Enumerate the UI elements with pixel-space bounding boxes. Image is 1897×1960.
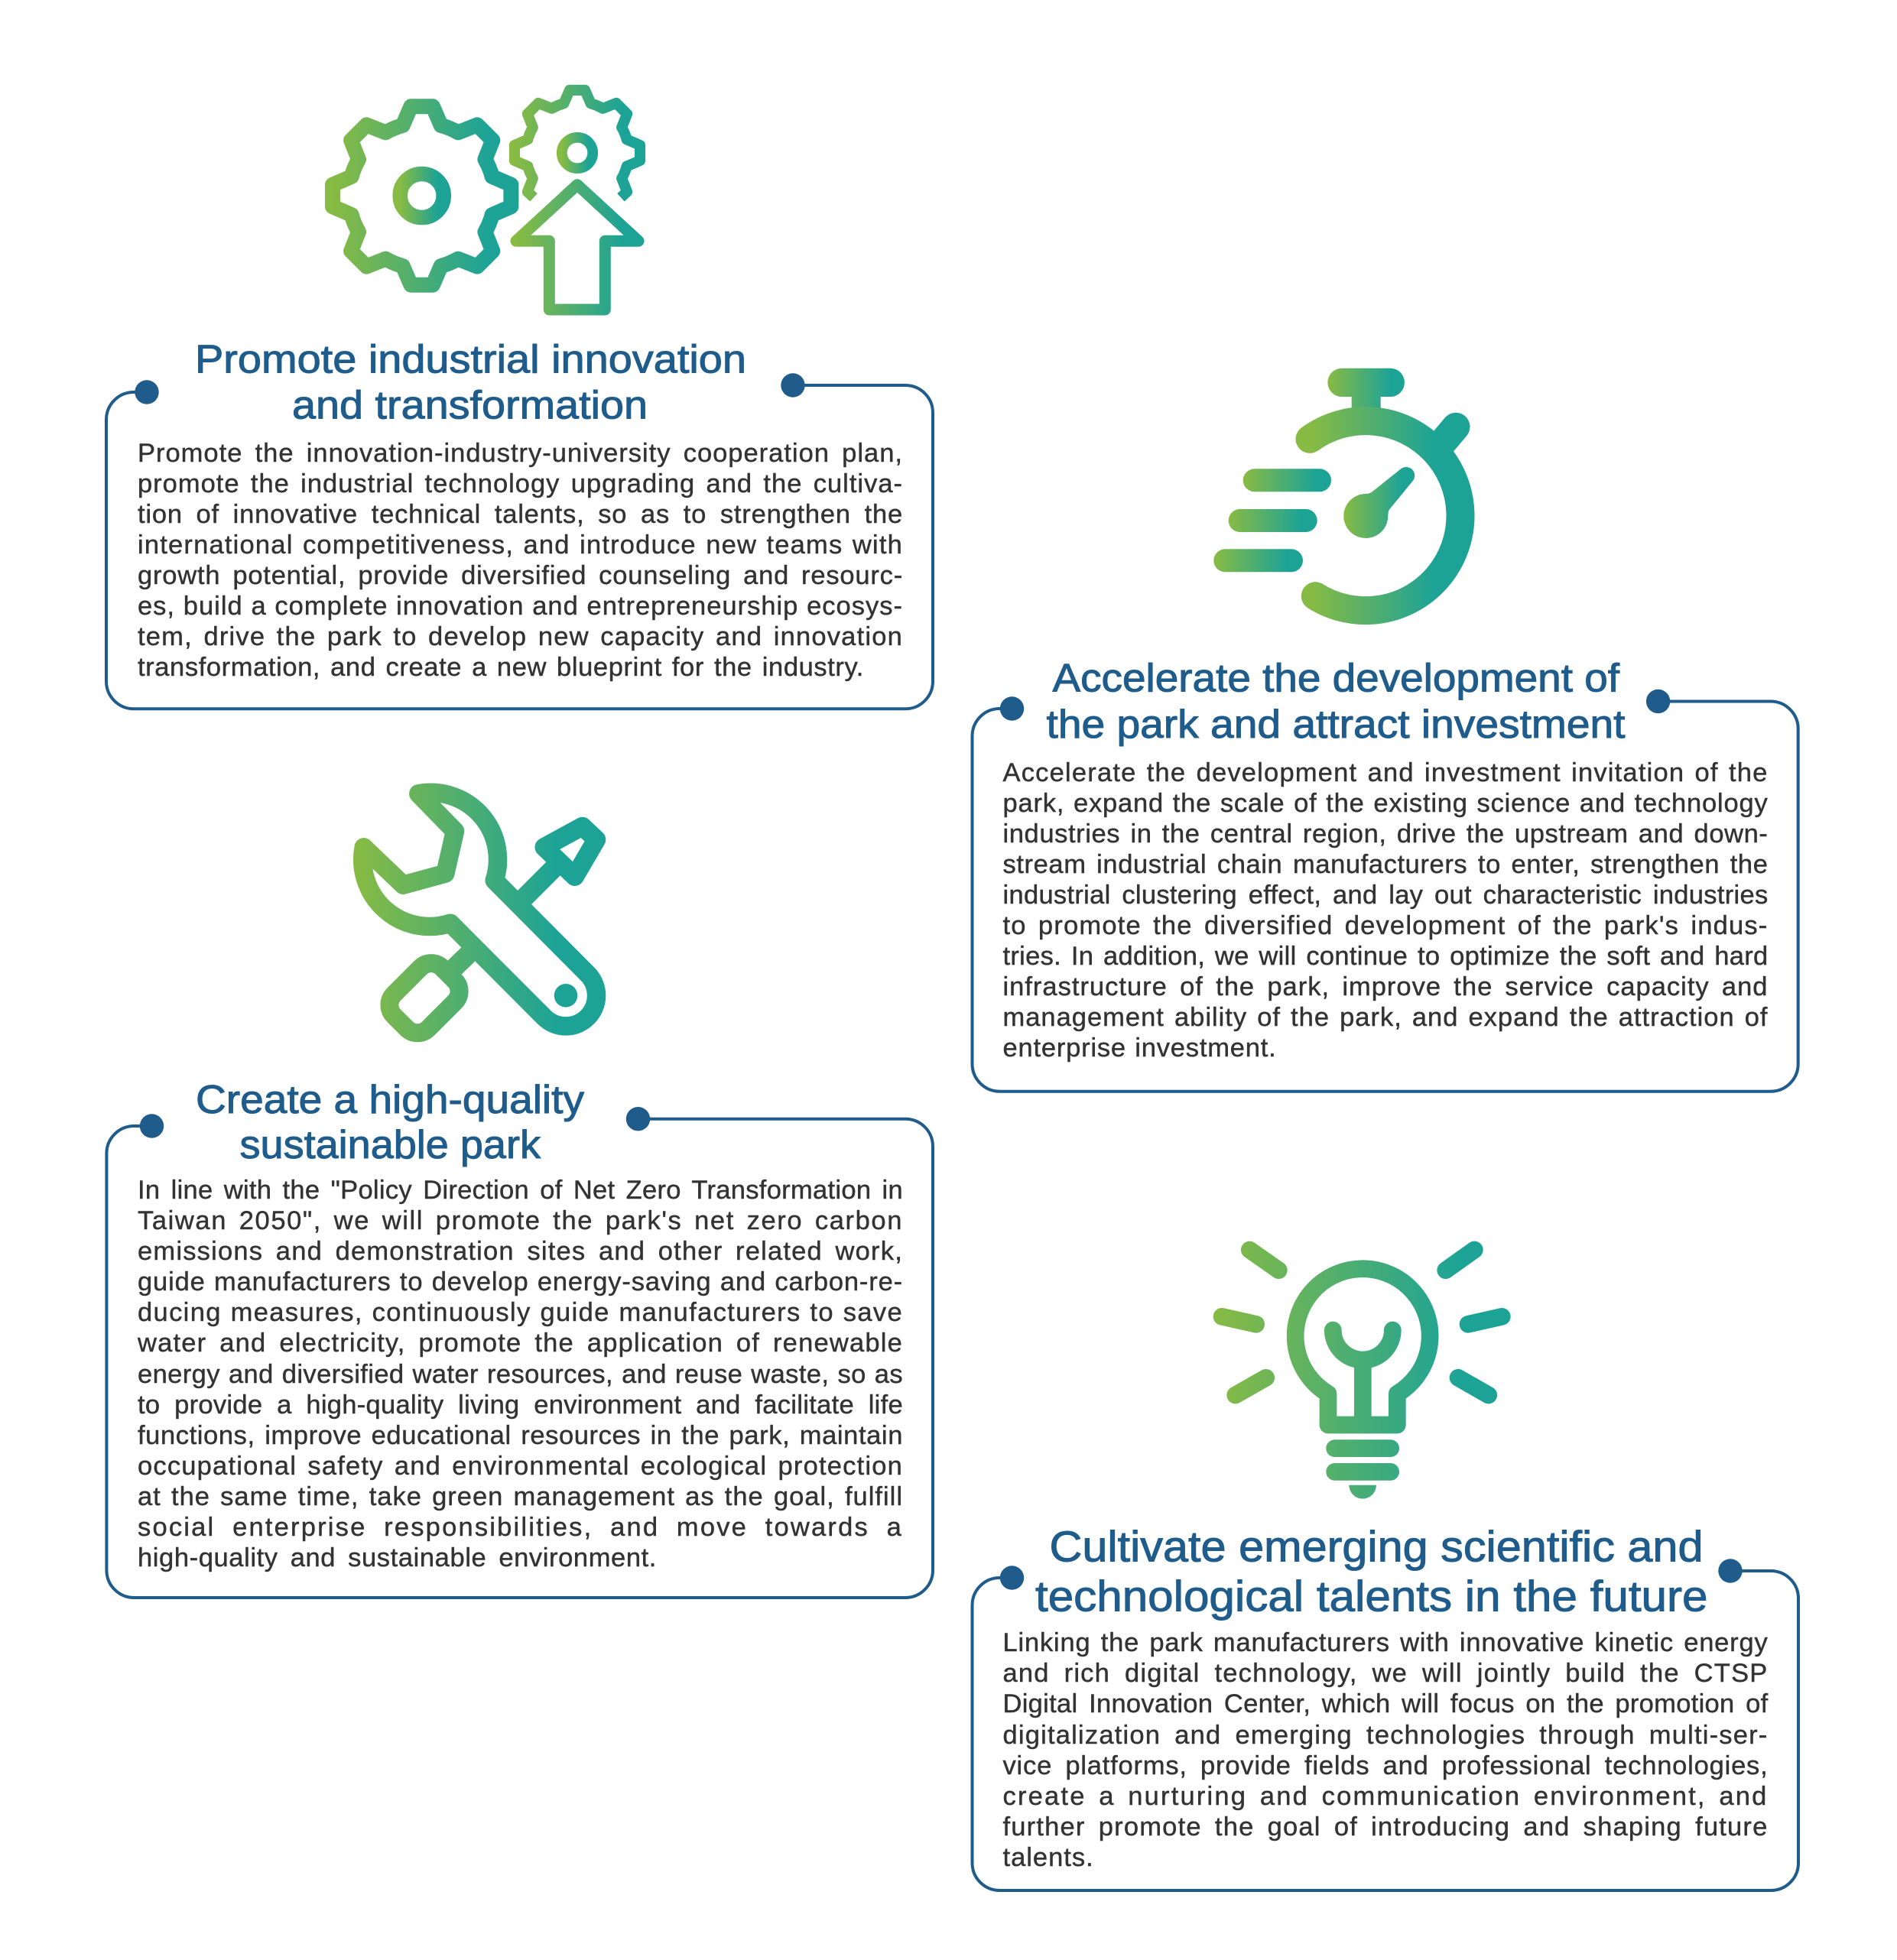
speed line 1 — [1243, 469, 1331, 492]
panel: promote industrial innovation — [105, 338, 934, 711]
body text: promote the industrial technology upgrading and the cultiva- — [138, 469, 903, 498]
icon: small gear — [515, 90, 640, 197]
body text — [138, 439, 903, 682]
body text: enterprise investment. — [1003, 1034, 1277, 1063]
heading — [195, 338, 746, 428]
body text — [1002, 758, 1768, 1063]
stopwatch hand — [1343, 467, 1415, 538]
body text: management ability of the park, and expand the attraction of — [1003, 1003, 1768, 1032]
body text: park, expand the scale of the existing science and technology — [1003, 789, 1768, 818]
stopwatch crown — [1327, 368, 1405, 417]
body text: water and electricity, promote the application of renewable — [138, 1329, 903, 1358]
body text: social enterprise responsibilities, and move towards a — [138, 1513, 903, 1542]
body text: es, build a complete innovation and entrepreneurship ecosys- — [138, 592, 903, 621]
body text: functions, improve educational resources in the park, maintain — [138, 1421, 903, 1450]
icon: large gear — [333, 106, 511, 285]
body text: guide manufacturers to develop energy-saving and carbon-re- — [138, 1267, 903, 1296]
icon: wrench and screwdriver — [353, 783, 606, 1043]
body text: occupational safety and environmental ecological protection — [138, 1452, 903, 1481]
bulb base bar 2 — [1326, 1463, 1399, 1481]
body text: to promote the diversified development of the park's indus- — [1003, 911, 1768, 940]
heading: sustainable park — [240, 1123, 541, 1167]
bulb filament — [1333, 1330, 1392, 1360]
heading: Create a high-quality — [196, 1078, 584, 1122]
heading: technological talents in the future — [1035, 1572, 1708, 1621]
heading: and transformation — [292, 384, 648, 428]
body text: tion of innovative technical talents, so as to strengthen the — [138, 500, 903, 529]
screwdriver grip — [389, 963, 460, 1033]
icon: stopwatch — [1213, 368, 1474, 625]
panel: create a high-quality sustainable park — [105, 1078, 934, 1599]
body text: industries in the central region, drive the upstream and down- — [1003, 819, 1768, 849]
body text: Promote the innovation-industry-university cooperation plan, — [138, 439, 903, 468]
speed line 3 — [1213, 549, 1303, 572]
filament stem — [1354, 1360, 1372, 1425]
heading — [196, 1078, 585, 1167]
body text: talents. — [1003, 1843, 1094, 1872]
body text: tries. In addition, we will continue to optimize the soft and hard — [1003, 942, 1768, 971]
body text: and rich digital technology, we will jointly build the CTSP — [1003, 1659, 1768, 1688]
panel frame — [971, 690, 1800, 1093]
light rays — [1222, 1250, 1502, 1395]
wrench — [362, 793, 596, 1026]
body text: international competitiveness, and introduce new teams with — [138, 531, 903, 560]
heading: Cultivate emerging scientific and — [1049, 1523, 1704, 1572]
icon: up arrow — [516, 185, 638, 310]
body text: Taiwan 2050", we will promote the park's net zero carbon — [138, 1206, 903, 1235]
icon: gears with up arrow — [325, 84, 645, 315]
body text: Linking the park manufacturers with innovative kinetic energy — [1003, 1628, 1768, 1657]
heading: Promote industrial innovation — [195, 338, 746, 382]
screwdriver tip — [544, 826, 596, 877]
body text: stream industrial chain manufacturers to enter, strengthen the — [1003, 850, 1768, 879]
icon: large gear hub — [400, 174, 443, 217]
body text: at the same time, take green management as the goal, fulfill — [138, 1482, 903, 1511]
stopwatch side button — [1437, 427, 1456, 449]
heading: Accelerate the development of — [1052, 657, 1620, 701]
bulb base bar 1 — [1326, 1439, 1399, 1457]
body text: to provide a high-quality living environment and facilitate life — [138, 1390, 903, 1420]
stopwatch ring — [1310, 421, 1460, 611]
panel: accelerate the development — [971, 657, 1800, 1093]
heading: the park and attract investment — [1046, 703, 1626, 747]
body text: infrastructure of the park, improve the service capacity and — [1003, 972, 1768, 1001]
body text: energy and diversified water resources, and reuse waste, so as — [138, 1360, 903, 1389]
body text: industrial clustering effect, and lay out characteristic industries — [1003, 881, 1768, 910]
body text — [1002, 1628, 1768, 1872]
body text — [138, 1176, 903, 1572]
icon: light bulb — [1213, 1241, 1511, 1498]
heading — [1035, 1523, 1708, 1621]
screwdriver shaft lower — [451, 950, 473, 971]
body text: emissions and demonstration sites and other related work, — [138, 1237, 903, 1266]
panel: cultivate emerging talents — [971, 1523, 1800, 1892]
body text: further promote the goal of introducing and shaping future — [1003, 1812, 1768, 1842]
speed line 2 — [1229, 509, 1317, 532]
body text: tem, drive the park to develop new capacity and innovation — [138, 622, 903, 651]
panel frame — [105, 1107, 934, 1599]
bulb tip — [1349, 1485, 1376, 1499]
body text: create a nurturing and communication environment, and — [1003, 1782, 1768, 1811]
body text: growth potential, provide diversified counseling and resourc- — [138, 561, 903, 590]
icon: small gear hub — [562, 138, 593, 168]
body text: transformation, and create a new blueprint for the industry. — [138, 653, 864, 682]
body text: Digital Innovation Center, which will focus on the promotion of — [1003, 1689, 1768, 1718]
panel frame — [105, 373, 934, 711]
bulb outline — [1295, 1269, 1430, 1425]
body text: Accelerate the development and investment invitation of the — [1003, 758, 1768, 787]
body text: In line with the "Policy Direction of Net Zero Transformation in — [138, 1176, 903, 1205]
panel frame — [971, 1559, 1800, 1892]
heading — [1046, 657, 1626, 747]
body text: vice platforms, provide fields and professional technologies, — [1003, 1751, 1768, 1780]
wrench hole dot — [554, 984, 577, 1008]
body text: high-quality and sustainable environment. — [138, 1543, 657, 1572]
screwdriver shaft upper — [520, 860, 562, 902]
body text: digitalization and emerging technologies through multi-ser- — [1003, 1721, 1768, 1750]
body text: ducing measures, continuously guide manufacturers to save — [138, 1298, 903, 1327]
